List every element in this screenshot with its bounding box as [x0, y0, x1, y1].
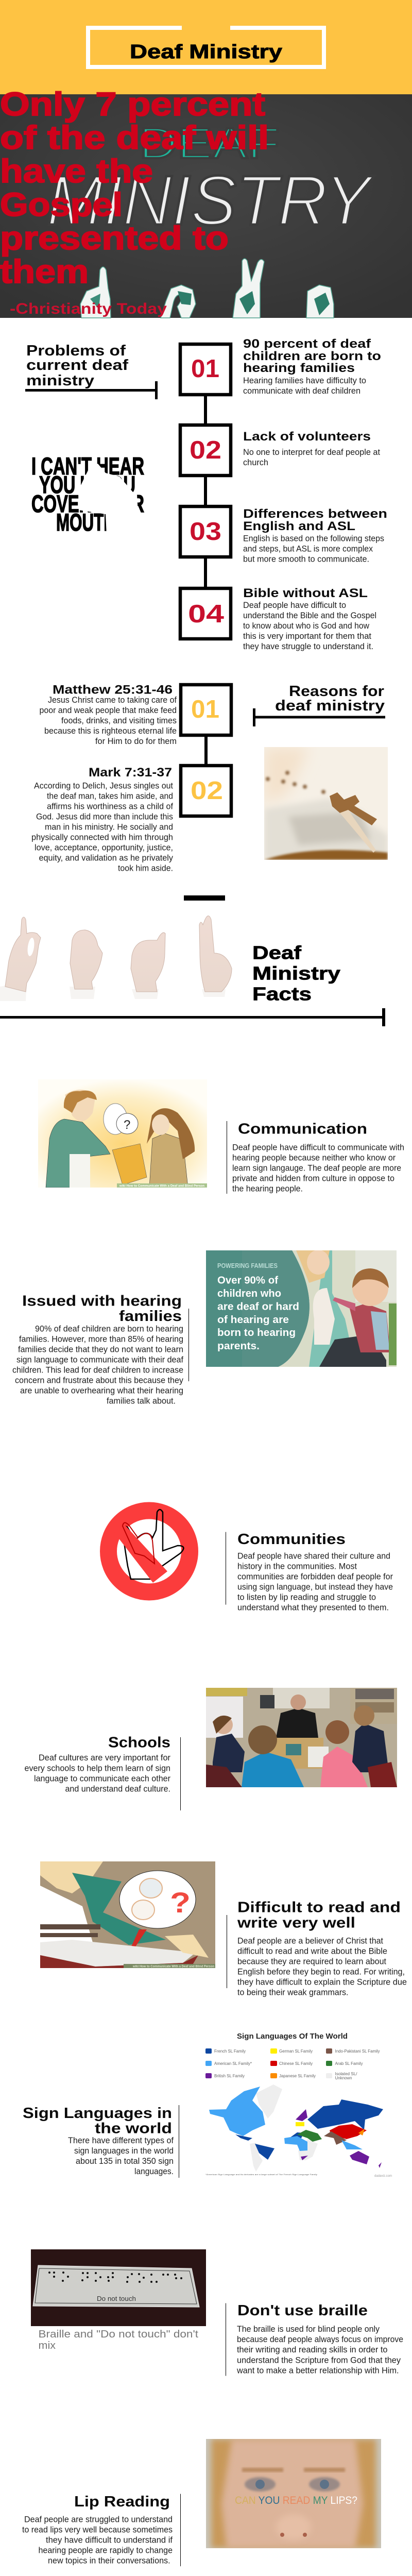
reason 02: According to Delich, Jesus singles out [34, 781, 173, 790]
accent bar [184, 895, 225, 901]
card text: children who [217, 1288, 281, 1299]
illustration: person reading a book [40, 1861, 215, 1968]
photo: braille plate [31, 2249, 206, 2326]
step 03: 03 [190, 518, 221, 546]
step 02: No one to interpret for deaf people at [243, 447, 380, 457]
reason 01: Matthew 25:31-46 [53, 683, 173, 697]
body text: language to communicate each other [34, 1773, 170, 1783]
photo: braille plate: Do not touch [97, 2295, 136, 2302]
body text: 90% of deaf children are born to hearing [35, 1324, 183, 1334]
body text: children. This lead for deaf children to increase [12, 1365, 183, 1375]
step 02 [180, 425, 380, 476]
body text: understand the Scripture from God that they [237, 2355, 401, 2365]
heading: ministry [26, 372, 94, 389]
photo caption [38, 2329, 198, 2351]
heading: Schools [108, 1735, 170, 1751]
step 04: to know about who is God and how [243, 621, 370, 631]
body text: English before they begin to read. For writing, [237, 1967, 405, 1977]
step 01: 90 percent of deaf [243, 337, 371, 351]
heading: Lip Reading [74, 2494, 170, 2510]
panel: sign languages in the world [23, 2032, 392, 2178]
body text: families decide that they do not want to learn [18, 1345, 183, 1354]
step 04: Deaf people have difficult to [243, 600, 346, 610]
step 01: children are born to [243, 349, 381, 363]
photo caption: CAN YOU READ MY LIPS? [235, 2495, 357, 2506]
divider [180, 1737, 181, 1810]
timeline connectors [204, 396, 207, 587]
panel: communication fact [38, 1079, 404, 1194]
reason 02: took him aside. [118, 863, 173, 873]
poster: can't hear you: YOU IF YOU [39, 471, 135, 498]
body text: the hearing people. [232, 1184, 303, 1194]
card text: of hearing are [217, 1314, 289, 1326]
hero statistic in red: of the deaf will [0, 119, 269, 156]
map legend: Arab SL Family [335, 2061, 363, 2066]
step 04 [180, 586, 376, 651]
hero statistic in red: Gospel [0, 186, 123, 223]
photo: woman's face with caption [206, 2439, 381, 2548]
heading: write very well [237, 1915, 355, 1931]
hero word: DEAF: DEAF [139, 119, 280, 167]
panel: communities [108, 1510, 393, 1613]
photo caption: Braille and "Do not touch" don't [38, 2329, 198, 2340]
card text: Over 90% of [217, 1275, 278, 1286]
step 01: Hearing families have difficulty to [243, 376, 366, 385]
reason 02: love, acceptance, opportunity, justice, [35, 842, 173, 852]
map legend: Chinese SL Family [279, 2061, 313, 2066]
body text: to listen by lip reading and struggle to [237, 1592, 376, 1602]
connector [204, 737, 208, 765]
heading [25, 343, 158, 399]
reason 01: 01 [191, 696, 219, 723]
step 03 [180, 506, 387, 564]
body text [22, 2514, 173, 2566]
map legend: Japanese SL Family [279, 2074, 316, 2078]
step 01: hearing families [243, 361, 355, 375]
body text: difficult to read and write about the Bible [237, 1946, 387, 1956]
body text: understand what they presented to them. [237, 1603, 389, 1613]
body text: and understand deaf culture. [65, 1784, 170, 1793]
divider [188, 1309, 189, 1381]
body text: hearing people because neither who know or [232, 1153, 396, 1162]
body text: families talk about. [107, 1396, 176, 1406]
photo caption: mix [38, 2340, 56, 2351]
icon: four hands spelling deaf [0, 916, 232, 1001]
card text: parents. [217, 1341, 260, 1352]
panel: difficult to read and write [40, 1861, 407, 1997]
heading: families [119, 1308, 182, 1325]
step 03: but more smooth to communicate. [243, 554, 369, 564]
step 04: understand the Bible and the Gospel [243, 611, 376, 620]
body text: using sign language, but instead they have [237, 1582, 393, 1592]
world map: dadaviz.com [374, 2175, 392, 2178]
reason 02 [31, 766, 231, 873]
step 02: 02 [190, 436, 221, 464]
body text: languages. [134, 2166, 174, 2176]
heading: Deaf [252, 942, 302, 963]
panel: reasons for deaf ministry [31, 683, 388, 873]
reason 02: 02 [191, 777, 223, 805]
body text: are unable to overhearing what their hearing [20, 1386, 183, 1396]
body text: every schools to help them learn of sign [25, 1763, 170, 1773]
photo: classroom with signing teacher [206, 1688, 397, 1787]
body text: they have difficult to explain the Scripture due [237, 1977, 407, 1987]
hero statistic in red: have the [0, 152, 153, 190]
body text [25, 1753, 170, 1793]
card text: are deaf or hard [217, 1301, 299, 1313]
step 01: 01 [191, 355, 219, 383]
divider [180, 2494, 181, 2566]
hero source: -Christianity Today [10, 300, 167, 317]
body text: because deaf people always focus on improve [237, 2334, 403, 2344]
body text: to read lips very well because sometimes [22, 2524, 173, 2535]
heading: Communication [238, 1121, 367, 1138]
hero statistic in red [0, 86, 269, 290]
body text: concern and frustrate about this because they [15, 1376, 183, 1385]
hero statistic in red: Only 7 percent [0, 86, 265, 123]
card text: born to hearing [217, 1327, 296, 1338]
map legend: Unknown [335, 2076, 352, 2080]
underline rule [0, 1008, 385, 1026]
world map: *American Sign Language and its derivates are a large subset of The French Sign Language Family [205, 2173, 317, 2176]
body text: because they are required to learn about [237, 1957, 386, 1967]
map legend: French SL Family [214, 2049, 246, 2054]
body text: There have different types of [68, 2136, 174, 2145]
heading: Ministry [252, 962, 340, 984]
reason 01: because this is righteous eternal life [44, 726, 177, 736]
illustration: person reading a book: ? [170, 1886, 191, 1919]
body text: new topics in their conversations. [48, 2555, 170, 2566]
heading: Facts [252, 983, 312, 1005]
step 03: and steps, but ASL is more complex [243, 544, 373, 553]
heading: Communities [237, 1531, 346, 1548]
body text: sign language to communicate with their deaf [16, 1355, 183, 1365]
body text: families. However, more than 85% of hearing [19, 1334, 183, 1344]
heading: Problems of [26, 343, 126, 359]
heading [253, 683, 385, 726]
map title: Sign Languages Of The World [237, 2032, 348, 2041]
heading: Difficult to read and [237, 1899, 401, 1916]
body text: learn sign langauge. The deaf people are more [232, 1163, 401, 1173]
heading: Sign Languages in [23, 2105, 172, 2122]
body text: want to make a better relationship with Him. [236, 2366, 399, 2375]
reason 02: affirms his worthiness as a child of [47, 801, 173, 811]
illustration: two people talking: wiki How to Communicate With a Deaf and Blind Person [119, 1185, 204, 1188]
map legend: Isolated SL/ [335, 2072, 357, 2076]
hero statistic in red: them [0, 253, 89, 290]
card text [217, 1262, 299, 1352]
step 04: Bible without ASL [243, 586, 368, 600]
panel: hero dark banner [0, 86, 412, 318]
reason 02: equity, and validation as he privately [39, 853, 173, 862]
world map [205, 2084, 392, 2178]
map legend: American SL Family* [214, 2061, 252, 2066]
body text [68, 2136, 174, 2176]
panel: problems of current deaf ministry [25, 337, 387, 651]
reason 02: God. Jesus did more than include this [36, 811, 173, 821]
body text: communities are forbidden deaf people for [237, 1572, 393, 1582]
body text [232, 1142, 404, 1194]
poster: can't hear you: I CAN'T HEAR [31, 452, 144, 480]
reason 02: the deaf man, takes him aside, and [47, 791, 173, 801]
body text: Deaf people are a believer of Christ that [237, 1936, 383, 1946]
step 02: Lack of volunteers [243, 430, 371, 444]
reason 02: physically connected with him through [31, 832, 173, 842]
step 03: English and ASL [243, 519, 355, 533]
step 01: communicate with deaf children [243, 386, 360, 396]
reason 02: man in his ministry. He socially and [45, 822, 173, 832]
heading: Issued with hearing [22, 1293, 182, 1310]
icon: forbidden sign language [108, 1510, 190, 1592]
step 01 [180, 337, 381, 396]
photo card: powering families [206, 1250, 397, 1367]
title: Deaf Ministry [130, 41, 282, 63]
body text: Deaf cultures are very important for [39, 1753, 170, 1762]
body text: their writing and reading skills in order to [237, 2345, 387, 2354]
panel: header band [0, 0, 412, 94]
illustration: two people talking: ? [124, 1118, 130, 1132]
photo: open bible with wooden cross [264, 747, 388, 860]
panel: don't use braille [31, 2249, 403, 2376]
card text: POWERING FAMILIES [217, 1262, 278, 1269]
heading: deaf ministry [275, 698, 385, 714]
body text: The braille is used for blind people only [237, 2324, 380, 2334]
heading [252, 942, 340, 1005]
heading: Don't use braille [237, 2302, 368, 2319]
panel: schools [25, 1688, 397, 1810]
step 04: 04 [188, 600, 224, 628]
body text: about 135 in total 350 sign [76, 2156, 174, 2166]
body text: hearing people are rapidly to change [38, 2545, 173, 2555]
step 03: Differences between [243, 507, 387, 521]
step 04: this is very important for them that [243, 631, 371, 641]
body text: to being their weak grammars. [237, 1988, 348, 1997]
step 03: English is based on the following steps [243, 534, 384, 543]
panel: deaf ministry facts header [0, 895, 385, 1026]
reason 01: foods, drinks, and visiting times [61, 716, 177, 725]
heading: the world [95, 2121, 172, 2137]
map legend [205, 2048, 380, 2080]
body text: they have difficult to understand if [46, 2535, 173, 2545]
body text [237, 1936, 407, 1997]
illustration: two people talking [38, 1079, 207, 1188]
body text: Deaf people have difficult to communicate with [232, 1142, 404, 1152]
poster: can't hear you: COVER YOUR [31, 490, 144, 517]
body text: Deaf people have shared their culture and [237, 1551, 390, 1561]
reason 01: Jesus Christ came to taking care of [48, 695, 177, 705]
reason 01 [39, 683, 231, 746]
reason 02: Mark 7:31-37 [89, 766, 172, 779]
map legend: German SL Family [279, 2049, 313, 2054]
poster: can't hear you: MOUTH [56, 509, 115, 536]
step 04: they have struggle to understand it. [243, 641, 373, 651]
body text: Deaf people are struggled to understand [24, 2514, 173, 2524]
icon: sketched signing hands [80, 259, 334, 318]
title frame [88, 28, 324, 67]
body text: sign languages in the world [74, 2146, 174, 2156]
heading: current deaf [26, 357, 128, 374]
body text: private and hidden from culture in oppose to [232, 1174, 394, 1183]
step 02: church [243, 457, 268, 467]
heading [23, 2105, 172, 2137]
heading: Reasons for [289, 683, 384, 700]
illustration: person reading a book: wiki How to Communicate With a Deaf and Blind Person [132, 1965, 214, 1968]
panel: issues with hearing families [12, 1250, 397, 1406]
panel: lip reading [22, 2439, 381, 2566]
hero statistic in red: presented to [0, 219, 229, 257]
body text [12, 1324, 183, 1406]
poster: can't hear you [31, 452, 144, 537]
hero word: MINISTRY: MINISTRY [47, 161, 374, 240]
body text: history in the communities. Most [237, 1562, 357, 1571]
body text [237, 1551, 393, 1613]
heading [22, 1293, 182, 1325]
heading [237, 1899, 401, 1931]
reason 01: poor and weak people that make feed [39, 705, 177, 715]
map legend: Indo-Pakistani SL Family [335, 2049, 380, 2054]
reason 01: for Him to do for them [95, 736, 177, 746]
map legend: British SL Family [214, 2074, 245, 2078]
body text [236, 2324, 403, 2375]
